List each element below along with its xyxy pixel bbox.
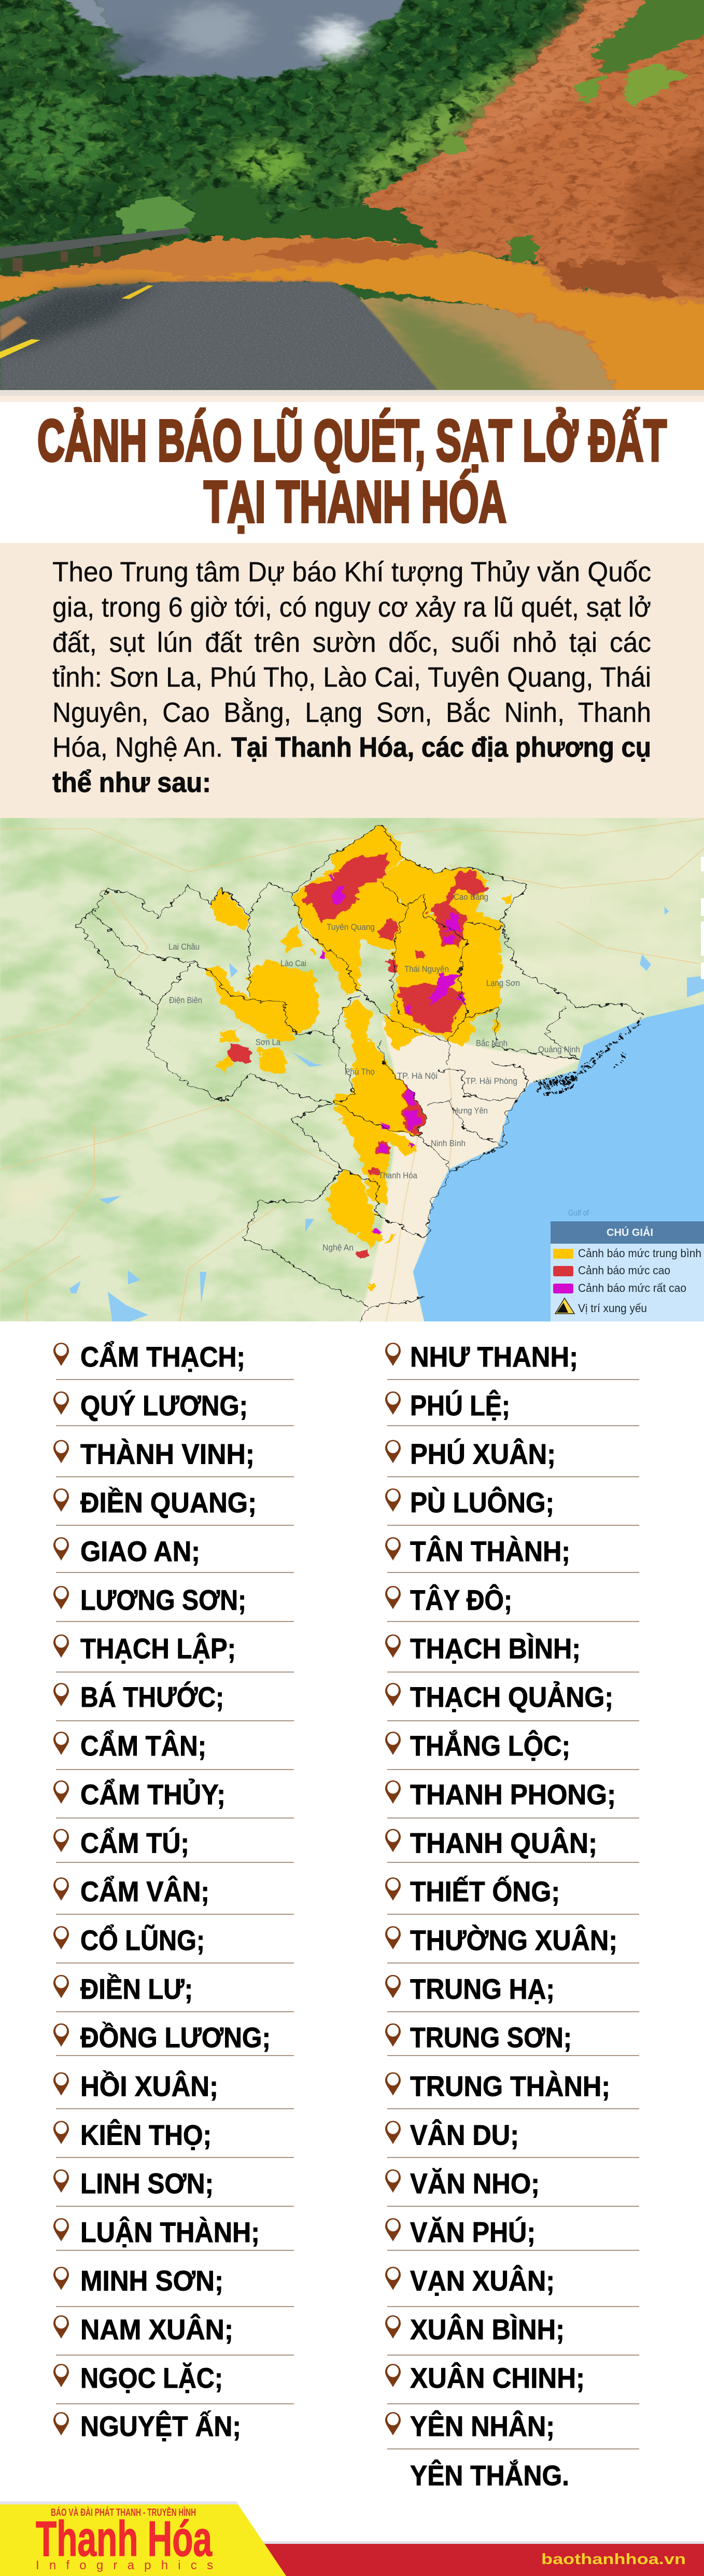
item: TÂN THÀNH; xyxy=(410,1535,570,1567)
map legend: Cảnh báo mức cao xyxy=(578,1264,670,1277)
panel: intro text: tỉnh: Sơn La, Phú Thọ, Lào Cai, Tuyên Quang, Thái xyxy=(52,662,651,693)
map labels: Bắc Ninh xyxy=(476,1038,508,1048)
item: THANH PHONG; xyxy=(410,1778,616,1811)
item: LUẬN THÀNH; xyxy=(80,2216,260,2248)
map labels: Lạng Sơn xyxy=(486,978,520,988)
item: NGỌC LẶC; xyxy=(80,2362,223,2394)
item: TRUNG THÀNH; xyxy=(410,2070,610,2102)
map labels: Gulf of xyxy=(568,1208,589,1218)
item: TRUNG HẠ; xyxy=(410,1973,555,2005)
guardrail xyxy=(0,228,191,259)
map legend: Vị trí xung yếu xyxy=(578,1302,647,1315)
item: THẠCH BÌNH; xyxy=(410,1633,581,1665)
item: THẠCH LẬP; xyxy=(80,1633,236,1665)
logo: Thanh Hóa: Thanh Hóa xyxy=(36,2511,212,2567)
item: CẨM TÂN; xyxy=(80,1730,206,1762)
map labels: Nghệ An xyxy=(322,1243,354,1252)
map labels: Cao Bằng xyxy=(454,892,488,902)
road xyxy=(0,282,438,390)
item: ĐỒNG LƯƠNG; xyxy=(80,2022,271,2054)
map labels: Ninh Bình xyxy=(431,1138,466,1148)
map labels xyxy=(168,892,589,1252)
map labels: Quảng Ninh xyxy=(538,1045,580,1054)
band below photo xyxy=(0,390,704,396)
item: YÊN THẮNG. xyxy=(410,2459,569,2491)
item: CẨM THỦY; xyxy=(80,1778,226,1811)
hill xyxy=(359,0,704,298)
item: PHÚ XUÂN; xyxy=(410,1438,556,1470)
item: NAM XUÂN; xyxy=(80,2313,233,2345)
item: CẨM VÂN; xyxy=(80,1875,209,1907)
item: THIẾT ỐNG; xyxy=(410,1875,560,1907)
item: ĐIỀN LƯ; xyxy=(80,1973,193,2005)
item: THẮNG LỘC; xyxy=(410,1730,570,1762)
map labels: Thanh Hóa xyxy=(378,1171,417,1180)
item: CẨM THẠCH; xyxy=(80,1341,245,1373)
province borders xyxy=(77,826,644,1322)
item: YÊN NHÂN; xyxy=(410,2410,555,2442)
panel: intro text: Nguyên, Cao Bằng, Lạng Sơn, Bắc Ninh, Thanh xyxy=(52,697,651,728)
list: right column xyxy=(385,1341,617,2491)
item: PHÚ LỆ; xyxy=(410,1389,510,1422)
item: NGUYỆT ẤN; xyxy=(80,2410,241,2442)
map labels: Tuyên Quang xyxy=(327,922,375,932)
dividers xyxy=(56,1380,639,2449)
title xyxy=(37,408,667,534)
map labels: Điện Biên xyxy=(169,995,202,1005)
website: baothanhhoa.vn xyxy=(541,2551,686,2568)
panel: intro text: Hóa, Nghệ An. xyxy=(52,732,223,763)
map legend: CHÚ GIẢI xyxy=(607,1226,653,1238)
item: GIAO AN; xyxy=(80,1535,200,1567)
item: VÂN DU; xyxy=(410,2119,519,2151)
item: BÁ THƯỚC; xyxy=(80,1681,224,1713)
item: VĂN PHÚ; xyxy=(410,2216,536,2248)
logo: Infographics: Infographics xyxy=(36,2558,213,2572)
map labels: Thái Nguyên xyxy=(404,964,449,974)
title: TẠI THANH HÓA xyxy=(204,469,506,534)
item: THANH QUÂN; xyxy=(410,1827,597,1859)
map labels: TP. Hà Nội xyxy=(397,1071,438,1081)
islands xyxy=(532,1019,642,1095)
warning areas xyxy=(206,826,513,1292)
item: THẠCH QUẢNG; xyxy=(410,1681,613,1713)
panel: intro text: thể như sau: xyxy=(52,767,211,798)
map labels: Hưng Yên xyxy=(453,1106,488,1116)
item: VĂN NHO; xyxy=(410,2167,540,2199)
panel: intro text: Theo Trung tâm Dự báo Khí tượng Thủy văn Quốc xyxy=(52,556,651,588)
item: NHƯ THANH; xyxy=(410,1341,578,1373)
item: CỔ LŨNG; xyxy=(80,1924,205,1956)
map labels: Sơn La xyxy=(256,1037,280,1047)
item: QUÝ LƯƠNG; xyxy=(80,1389,248,1422)
item: LƯƠNG SƠN; xyxy=(80,1584,246,1616)
item: LINH SƠN; xyxy=(80,2167,214,2199)
mud xyxy=(0,238,704,423)
item: TRUNG SƠN; xyxy=(410,2022,572,2054)
item: THÀNH VINH; xyxy=(80,1438,255,1470)
panel: landslide photo xyxy=(0,0,704,390)
map xyxy=(0,818,704,1322)
item: XUÂN BÌNH; xyxy=(410,2313,565,2345)
sea xyxy=(413,1004,704,1322)
panel: intro text: Tại Thanh Hóa, các địa phương cụ xyxy=(231,732,651,763)
map labels: Lai Châu xyxy=(168,942,200,952)
item: THƯỜNG XUÂN; xyxy=(410,1924,617,1956)
panel: intro text: gia, trong 6 giờ tới, có nguy cơ xảy ra lũ quét, sạt lở xyxy=(52,592,651,623)
map edge controls xyxy=(701,857,704,979)
panel: intro text: đất, sụt lún đất trên sườn dốc, suối nhỏ tại các xyxy=(52,627,651,658)
map legend xyxy=(551,1221,704,1321)
item: XUÂN CHINH; xyxy=(410,2362,585,2394)
item: VẠN XUÂN; xyxy=(410,2265,555,2297)
list: left column xyxy=(53,1341,271,2442)
item: PÙ LUÔNG; xyxy=(410,1486,554,1519)
footer xyxy=(0,2501,704,2576)
item: MINH SƠN; xyxy=(80,2265,223,2297)
icon: critical location xyxy=(555,1298,574,1314)
item: CẨM TÚ; xyxy=(80,1827,189,1859)
publisher line: BÁO VÀ ĐÀI PHÁT THANH - TRUYỀN HÌNH xyxy=(51,2507,196,2518)
map labels: Lào Cai xyxy=(280,958,306,968)
item: KIÊN THỌ; xyxy=(80,2119,212,2151)
map labels: TP. Hải Phòng xyxy=(466,1076,517,1086)
item: TÂY ĐÔ; xyxy=(410,1584,512,1616)
map labels: Phú Thọ xyxy=(345,1067,375,1077)
map legend: Cảnh báo mức rất cao xyxy=(578,1282,686,1294)
item: ĐIỀN QUANG; xyxy=(80,1486,257,1519)
panel: intro text xyxy=(0,543,704,818)
item: HỒI XUÂN; xyxy=(80,2070,218,2102)
